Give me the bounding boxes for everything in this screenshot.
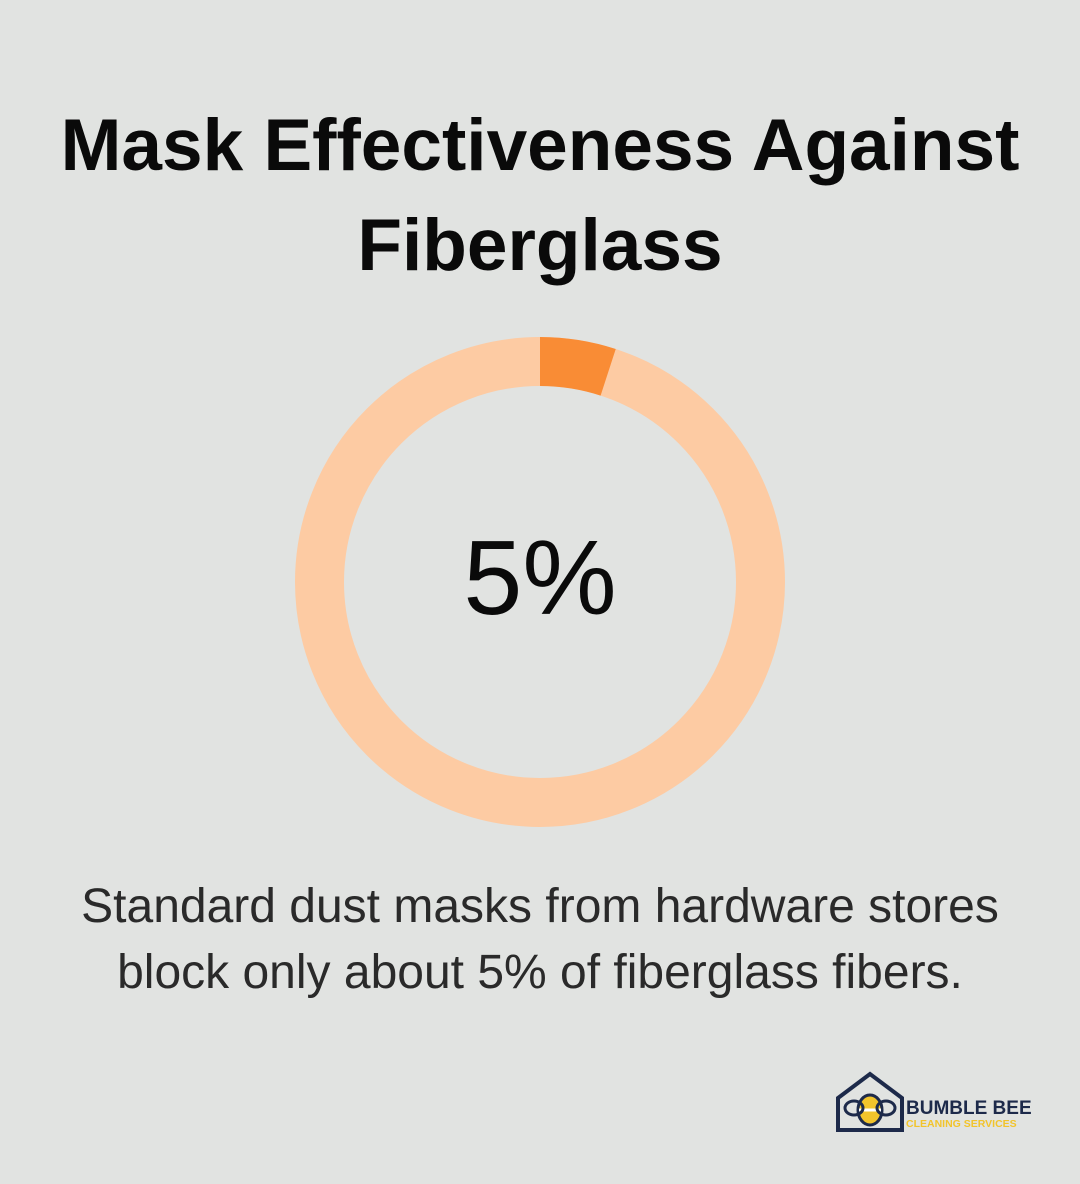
description: block only about 5% of fiberglass fibers. (117, 946, 963, 999)
logo: BUMBLE BEE (906, 1098, 1032, 1119)
logo: CLEANING SERVICES (906, 1118, 1017, 1130)
description (81, 880, 999, 999)
logo (836, 1072, 1032, 1132)
donut chart: 5% (463, 519, 617, 637)
title: Mask Effectiveness Against (61, 105, 1019, 186)
title (61, 105, 1019, 286)
description: Standard dust masks from hardware stores (81, 880, 999, 933)
title: Fiberglass (357, 205, 723, 286)
